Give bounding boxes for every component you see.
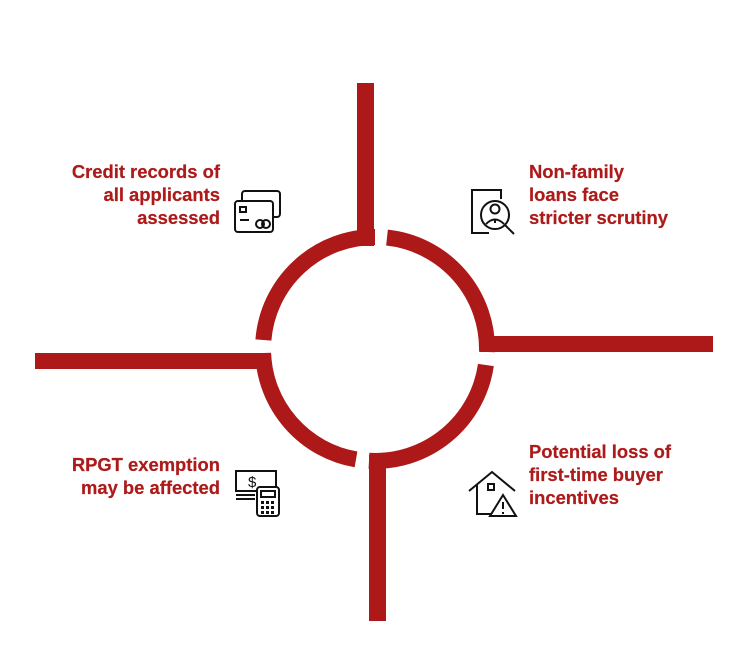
icon: house warning (468, 470, 518, 517)
text: first-time buyer: Potential loss of (529, 441, 671, 462)
text: credit records: Credit records of (72, 161, 220, 182)
text: RPGT: may be affected (81, 477, 220, 498)
text: non-family loans (529, 161, 668, 228)
text: first-time buyer (529, 441, 672, 508)
text: non-family loans: Non-family (529, 161, 624, 182)
text: first-time buyer: first-time buyer (529, 464, 663, 485)
text: non-family loans: stricter scrutiny (529, 207, 668, 228)
text: credit records: all applicants (103, 184, 220, 205)
text: first-time buyer: incentives (529, 487, 619, 508)
text: credit records: assessed (137, 207, 220, 228)
icon: cash and calculator: $ (248, 474, 257, 491)
text: credit records (72, 161, 220, 228)
text: non-family loans: loans face (529, 184, 619, 205)
text: RPGT: RPGT exemption (72, 454, 220, 475)
icon: document search person (471, 189, 515, 235)
icon: cash and calculator (235, 470, 280, 517)
text: RPGT (72, 454, 220, 498)
icon: credit cards (234, 190, 281, 233)
